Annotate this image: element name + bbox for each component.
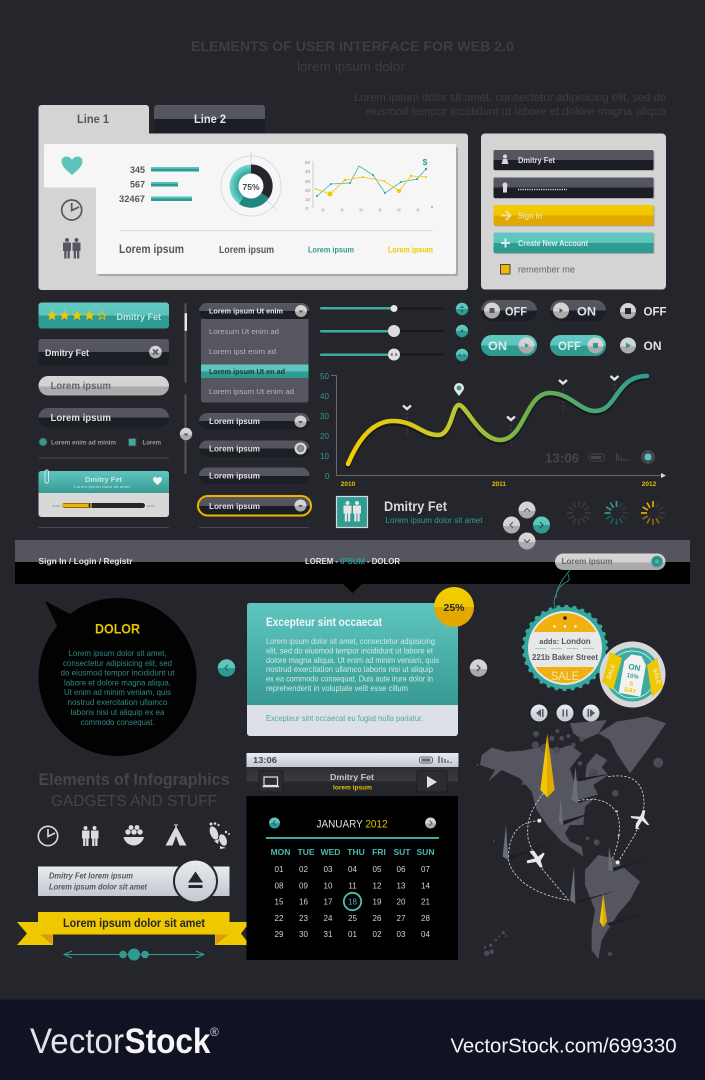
intro text bbox=[354, 92, 667, 118]
calendar days: 04 bbox=[348, 865, 357, 874]
line chart: 10 bbox=[305, 197, 310, 202]
select pill 1: Lorem ipsum bbox=[209, 416, 260, 426]
dropdown items: Lorem ipsum Ut en ad bbox=[209, 367, 285, 376]
select pill focused: Lorem ipsum bbox=[209, 501, 260, 511]
spinner teal bbox=[604, 501, 628, 525]
icon: clock bbox=[38, 826, 58, 846]
tab: Line 2 bbox=[154, 105, 265, 133]
calendar days: 19 bbox=[373, 898, 382, 906]
input with clear button: Dmitry Fet bbox=[45, 348, 90, 359]
content card: dolore magna aliqua. Ut enim ad minim veniam, quis bbox=[266, 655, 439, 665]
toggle: on teal bbox=[481, 335, 537, 356]
calendar days: 29 bbox=[275, 930, 284, 939]
line chart: 50 bbox=[305, 160, 310, 165]
calendar days: 30 bbox=[299, 930, 308, 939]
calendar days: 04 bbox=[421, 930, 430, 939]
nav notch bbox=[343, 584, 362, 593]
calendar days: 01 bbox=[275, 865, 284, 874]
x axis labels: 2012 bbox=[642, 481, 657, 488]
player card: 13:06 bbox=[147, 504, 155, 508]
speech bubble: Ut enim ad minim veniam, quis bbox=[64, 687, 171, 697]
toggle: off plain: OFF bbox=[644, 304, 666, 318]
calendar days: 10 bbox=[324, 882, 333, 890]
player card: 13:06 bbox=[52, 504, 60, 508]
radio and checkbox row bbox=[39, 438, 161, 446]
card labels: Lorem ipsum bbox=[219, 245, 274, 256]
calendar days: 08 bbox=[275, 882, 284, 890]
profile block bbox=[336, 496, 483, 528]
dropdown items: Loresum Ut enim ad bbox=[209, 327, 279, 336]
icon: tent bbox=[166, 824, 186, 846]
sale tag badge: SALE bbox=[551, 669, 579, 683]
select pill focused bbox=[198, 496, 311, 516]
calendar days: 02 bbox=[299, 865, 308, 874]
search pill bbox=[555, 554, 666, 570]
dark pill: Lorem ipsum bbox=[50, 412, 111, 424]
calendar days: 31 bbox=[324, 930, 333, 939]
calendar nav bbox=[266, 818, 439, 839]
select pill 3 bbox=[199, 468, 310, 484]
map: route dots bbox=[537, 810, 620, 864]
sale tag badge: 221b Baker Street bbox=[532, 653, 598, 662]
icon: bowl bbox=[124, 825, 144, 846]
sale tag badge bbox=[524, 607, 606, 689]
field: username bbox=[494, 150, 654, 171]
spinner yellow bbox=[641, 501, 665, 525]
footer logo: Vector bbox=[30, 1022, 124, 1061]
map: yellow pin south bbox=[600, 893, 607, 927]
panel: login form bbox=[481, 134, 666, 290]
nav links: Sign In / Login / Registr bbox=[38, 556, 133, 566]
calendar days: 27 bbox=[397, 914, 406, 923]
calendar days: 16 bbox=[299, 898, 308, 906]
icon: footprints bbox=[208, 822, 230, 849]
speech bubble: laboris nisi ut aliquip ex ea bbox=[70, 707, 165, 717]
map: land masses bbox=[480, 717, 666, 959]
calendar weekdays: FRI bbox=[372, 847, 386, 857]
footer logo bbox=[30, 1022, 211, 1061]
sale round sticker: SALE bbox=[606, 664, 617, 681]
content card: Excepteur sint occaecat eu fugiat nulla pariatur. bbox=[266, 713, 423, 723]
x axis labels: 2011 bbox=[492, 481, 506, 488]
map: plane 1 bbox=[631, 810, 649, 829]
calendar days: 03 bbox=[397, 930, 406, 939]
status strip: 13:06 bbox=[545, 450, 579, 466]
toggle: on dark: ON bbox=[577, 304, 596, 318]
media buttons bbox=[530, 704, 600, 722]
infographics heading: Elements of Infographics bbox=[38, 770, 230, 789]
content card: nostrud exercitation ullamco laboris nisi ut aliquip bbox=[266, 664, 433, 674]
phone header bbox=[246, 767, 458, 796]
select pill 2: Lorem ipsum bbox=[209, 444, 260, 454]
toggle: on plain bbox=[620, 338, 662, 354]
speech bubble: labore et dolore magna aliqua. bbox=[64, 678, 171, 688]
calendar days bbox=[275, 865, 430, 939]
line chart: $ bbox=[423, 157, 428, 167]
toggle: off teal bbox=[550, 335, 606, 356]
calendar days: 02 bbox=[373, 930, 382, 939]
horizontal sliders bbox=[320, 303, 468, 361]
map bbox=[476, 717, 666, 959]
phone header: lorem ipsum bbox=[333, 784, 372, 792]
speech bubble: do eiusmod tempor incididunt ut bbox=[60, 668, 175, 678]
eject banner bbox=[38, 860, 230, 902]
arrow button right bbox=[470, 659, 487, 677]
calendar nav: JANUARY 2012 bbox=[316, 818, 388, 830]
panel: tabbed dashboard bbox=[38, 105, 468, 290]
content card: Lorem ipsum dolor sit amet, consectetur adipisicing bbox=[266, 636, 435, 646]
ornament divider bbox=[64, 949, 204, 960]
line chart: 40 bbox=[305, 169, 310, 174]
speech bubble: consectetur adipisicing elit, sed bbox=[63, 658, 172, 668]
profile block: Lorem ipsum dolor sit amet bbox=[386, 515, 483, 525]
icon row bbox=[38, 822, 230, 849]
calendar days: 22 bbox=[275, 914, 284, 923]
line chart bbox=[305, 157, 433, 212]
field: username: Dmitry Fet bbox=[518, 156, 555, 165]
checkbox: remember me: remember me bbox=[518, 264, 575, 274]
radio and checkbox row: Lorem enim ad minim bbox=[51, 440, 116, 446]
calendar days: 03 bbox=[324, 865, 333, 874]
footer band bbox=[0, 1000, 705, 1080]
light pill bbox=[38, 376, 169, 396]
content card: elit, sed do eiusmod tempor incididunt ut labore et bbox=[266, 646, 434, 656]
eject banner: Lorem ipsum dolor sit amet bbox=[49, 882, 147, 892]
calendar days: 11 bbox=[348, 882, 357, 890]
dropdown selected row bbox=[201, 364, 308, 378]
intro text: Lorem ipsum dolor sit amet, consectetur adipisicing elit, sed do bbox=[354, 92, 666, 104]
x axis labels bbox=[341, 481, 657, 488]
select pill 3: Lorem ipsum bbox=[209, 470, 260, 480]
content card: reprehenderit in voluptate velit esse cillum bbox=[266, 683, 408, 693]
infographics subheading: GADGETS AND STUFF bbox=[51, 793, 217, 810]
content card: ex ea commodo consequat. Duis aute irure dolor in bbox=[266, 674, 433, 684]
toggle: on teal: ON bbox=[488, 339, 507, 353]
calendar phone bbox=[246, 753, 458, 960]
dropdown header: Lorem ipsum Ut enim bbox=[209, 306, 283, 316]
player card: Dmitry Fet bbox=[85, 475, 122, 484]
toggle: on dark bbox=[550, 300, 606, 321]
input with clear button bbox=[38, 339, 169, 365]
arrow button left bbox=[218, 659, 235, 677]
speech bubble: Lorem ipsum dolor sit amet, bbox=[68, 648, 166, 658]
map: yellow pin north bbox=[540, 733, 555, 797]
yellow ribbon bbox=[17, 912, 250, 945]
vertical scrollbar bbox=[184, 303, 187, 383]
speech bubble: nostrud exercitation ullamco bbox=[68, 697, 168, 707]
line chart: 20 bbox=[305, 188, 310, 193]
sale round sticker: SALE bbox=[651, 668, 661, 685]
x axis labels: 2010 bbox=[341, 481, 356, 488]
map: dashed routes bbox=[508, 776, 644, 900]
badge 25% bbox=[434, 587, 474, 627]
content card: Excepteur sint occaecat bbox=[266, 617, 382, 629]
map: plane 2 bbox=[527, 851, 545, 867]
calendar weekdays: SUT bbox=[394, 847, 411, 857]
donut chart: 75% bbox=[242, 182, 260, 192]
vertical slider bbox=[180, 394, 192, 474]
sticker tag: ON bbox=[628, 662, 641, 673]
icon: people bbox=[63, 238, 80, 258]
navigation bar bbox=[15, 540, 690, 593]
calendar days: 17 bbox=[324, 898, 333, 906]
player card: Lorem ipsum dolor sit amet bbox=[74, 484, 131, 489]
card labels: Lorem ipsum bbox=[119, 244, 184, 256]
calendar days: 15 bbox=[275, 898, 284, 906]
y axis labels: 0 bbox=[325, 472, 330, 481]
y axis labels bbox=[320, 372, 330, 481]
sticker tag: DAY bbox=[624, 687, 637, 695]
button: create account bbox=[494, 232, 654, 254]
sticker tag: 10% bbox=[626, 673, 640, 681]
calendar days: 18 bbox=[348, 898, 357, 906]
sale tag string bbox=[554, 570, 570, 618]
registered mark: ® bbox=[210, 1025, 219, 1039]
speech bubble bbox=[38, 598, 196, 756]
light pill: Lorem ipsum bbox=[50, 380, 111, 392]
intro text: eiusmod tempor incididunt ut labore et dolore magna aliqua bbox=[365, 106, 667, 118]
calendar days: 28 bbox=[421, 914, 430, 923]
select pill 1 bbox=[199, 413, 310, 430]
sticker tag: 5 bbox=[629, 681, 634, 688]
status strip bbox=[545, 450, 655, 466]
button: sign in bbox=[494, 205, 654, 226]
icon: heart bbox=[62, 156, 82, 175]
title: ELEMENTS OF USER INTERFACE FOR WEB 2.0 bbox=[191, 38, 514, 54]
donut chart bbox=[221, 152, 281, 216]
calendar days: 26 bbox=[373, 914, 382, 923]
bar list: 567 bbox=[130, 180, 145, 190]
profile block: Dmitry Fet bbox=[384, 499, 447, 514]
tab: Line 1: Line 1 bbox=[77, 114, 110, 126]
dropdown menu bbox=[199, 303, 310, 402]
calendar days: 06 bbox=[397, 865, 406, 874]
map: scattered dots bbox=[476, 729, 663, 956]
button: sign in: Sign In bbox=[518, 212, 542, 220]
radio and checkbox row: Lorem bbox=[142, 440, 161, 446]
nav center menu: LOREM - IPSUM - DOLOR bbox=[305, 556, 400, 566]
field: password bbox=[494, 178, 654, 199]
calendar days: 01 bbox=[348, 930, 357, 939]
icon: people bbox=[82, 826, 98, 846]
bar list: 345 bbox=[130, 165, 146, 176]
calendar days: 13 bbox=[397, 882, 406, 890]
y axis labels: 50 bbox=[320, 372, 329, 381]
badge 25%: 25% bbox=[443, 602, 465, 614]
search pill: Lorem ipsum bbox=[562, 556, 613, 566]
sale round sticker bbox=[600, 642, 666, 708]
yellow ribbon: Lorem ipsum dolor sit amet bbox=[63, 916, 205, 930]
footer url: VectorStock.com/699330 bbox=[450, 1036, 676, 1058]
white card bbox=[44, 144, 456, 274]
speech bubble: DOLOR bbox=[95, 620, 140, 636]
content card bbox=[247, 603, 458, 736]
card shadow bbox=[98, 147, 458, 276]
calendar weekdays: MON bbox=[271, 847, 290, 857]
map pin marker bbox=[454, 383, 464, 396]
chart markers bbox=[403, 376, 618, 420]
calendar days: 24 bbox=[324, 914, 333, 923]
button: create account: Create New Account bbox=[518, 239, 588, 248]
select pill 2 bbox=[199, 440, 310, 457]
calendar days: 20 bbox=[397, 898, 406, 906]
calendar days: 23 bbox=[299, 914, 308, 923]
calendar days: 05 bbox=[373, 865, 382, 874]
eject banner: Dmitry Fet lorem ipsum bbox=[49, 872, 133, 880]
phone status bar bbox=[246, 753, 458, 767]
calendar days: 25 bbox=[348, 914, 357, 923]
calendar weekdays bbox=[271, 847, 434, 857]
rating bar: Dmitry Fet bbox=[116, 312, 162, 323]
spinner gray bbox=[567, 501, 591, 525]
calendar weekdays: TUE bbox=[298, 847, 315, 857]
tab: Line 2: Line 2 bbox=[194, 114, 226, 126]
player card bbox=[38, 470, 169, 517]
toggle: off teal: OFF bbox=[558, 339, 581, 353]
line chart: 0 bbox=[305, 206, 308, 211]
toggle: on plain: ON bbox=[644, 339, 662, 353]
subtitle: lorem ipsum dolor bbox=[297, 59, 406, 74]
line chart: 30 bbox=[305, 179, 310, 184]
bar list: 32467 bbox=[119, 194, 145, 205]
today ring bbox=[344, 893, 361, 910]
card labels: Lorem ipsum bbox=[308, 244, 354, 254]
calendar days: 21 bbox=[421, 898, 430, 906]
slider step buttons bbox=[456, 303, 468, 361]
sticker ribbons bbox=[602, 652, 622, 690]
main curve chart bbox=[320, 372, 666, 488]
y axis labels: 40 bbox=[320, 392, 329, 401]
phone header: Dmitry Fet bbox=[330, 772, 374, 782]
toggle: off dark bbox=[481, 300, 537, 321]
curve line bbox=[348, 376, 647, 464]
card labels: Lorem ipsum bbox=[388, 244, 433, 254]
dropdown items: Lorem ipsum Ut enim ad bbox=[209, 387, 294, 396]
sale tag badge: adds: London bbox=[539, 637, 591, 646]
dark pill bbox=[38, 408, 169, 428]
calendar days: 09 bbox=[299, 882, 308, 890]
speech bubble: commodo consequat. bbox=[80, 717, 154, 727]
card labels bbox=[119, 244, 433, 256]
y axis labels: 10 bbox=[320, 452, 329, 461]
calendar weekdays: THU bbox=[347, 847, 365, 857]
map: dark shadow spikes bbox=[507, 773, 648, 926]
dropdown items: Lorem ipst enim ad bbox=[209, 347, 276, 356]
toggle: off plain bbox=[620, 303, 666, 319]
toggle: off dark: OFF bbox=[505, 304, 527, 318]
calendar days: 14 bbox=[421, 882, 430, 890]
phone status bar: 13:06 bbox=[253, 755, 277, 765]
rating bar bbox=[38, 302, 169, 328]
tab: Line 1 bbox=[38, 105, 468, 290]
calendar days: 12 bbox=[373, 882, 382, 890]
calendar weekdays: WED bbox=[321, 847, 340, 857]
map: markers bbox=[503, 767, 613, 904]
footer logo: Stock bbox=[124, 1022, 211, 1061]
bar list bbox=[119, 165, 199, 205]
calendar days: 07 bbox=[421, 865, 430, 874]
d-pad bbox=[503, 502, 550, 550]
dropdown items bbox=[209, 327, 294, 396]
calendar weekdays: SUN bbox=[417, 847, 434, 857]
y axis labels: 20 bbox=[320, 432, 329, 441]
y axis labels: 30 bbox=[320, 412, 329, 421]
sticker tag bbox=[619, 653, 647, 697]
icon: clock bbox=[62, 200, 82, 220]
